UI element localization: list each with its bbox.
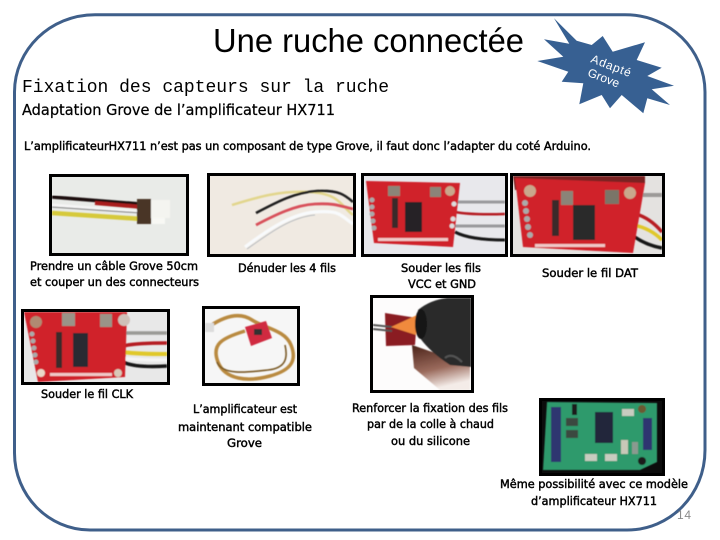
badge star shape <box>537 18 674 113</box>
photo 6: finished Grove amplifier <box>204 308 298 384</box>
subtitle: fixation: Fixation des capteurs sur la ruche <box>22 78 389 98</box>
caption 8: Même possibilité avec ce modèle <box>500 477 688 491</box>
title: Une ruche connectée <box>213 22 524 59</box>
caption 6: maintenant compatible <box>178 420 312 434</box>
caption 3 <box>401 261 481 291</box>
caption 8 <box>500 477 688 508</box>
photo 4: DAT soldered <box>512 174 664 256</box>
photo 1: Grove cable <box>50 176 188 254</box>
caption 1: Prendre un câble Grove 50cm <box>30 259 198 273</box>
subtitle: adaptation: Adaptation Grove de l’amplificateur HX711 <box>22 101 335 119</box>
photo 3: VCC and GND soldered <box>362 174 506 256</box>
badge: Adapté Grove <box>537 18 674 113</box>
caption 7: Renforcer la fixation des fils <box>352 401 508 415</box>
badge text: Grove <box>586 66 622 91</box>
photo 7: glue gun <box>372 296 472 392</box>
caption 2: Dénuder les 4 fils <box>238 261 336 275</box>
caption 6: L’amplificateur est <box>193 402 297 416</box>
photo 2: stripped wires <box>208 174 354 256</box>
photo 5: CLK soldered <box>22 310 168 384</box>
caption 3: Souder les fils <box>401 261 481 275</box>
caption 3: VCC et GND <box>408 277 476 291</box>
intro text: L’amplificateurHX711 n’est pas un composant de type Grove, il faut donc l’adapter du coté Arduino. <box>24 139 591 153</box>
caption 7: par de la colle à chaud <box>367 417 494 431</box>
caption 7: ou du silicone <box>391 434 470 448</box>
caption 6: Grove <box>227 436 262 450</box>
caption 1: et couper un des connecteurs <box>30 275 199 289</box>
caption 8: d’amplificateur HX711 <box>531 494 657 508</box>
caption 7 <box>352 401 508 448</box>
caption 4: Souder le fil DAT <box>542 266 639 280</box>
photo 8: green HX711 module <box>540 400 664 474</box>
caption 6 <box>178 402 312 450</box>
page number: 14 <box>677 508 691 522</box>
caption 5: Souder le fil CLK <box>41 387 133 401</box>
caption 1 <box>30 259 199 289</box>
badge text: Adapté <box>589 52 633 80</box>
